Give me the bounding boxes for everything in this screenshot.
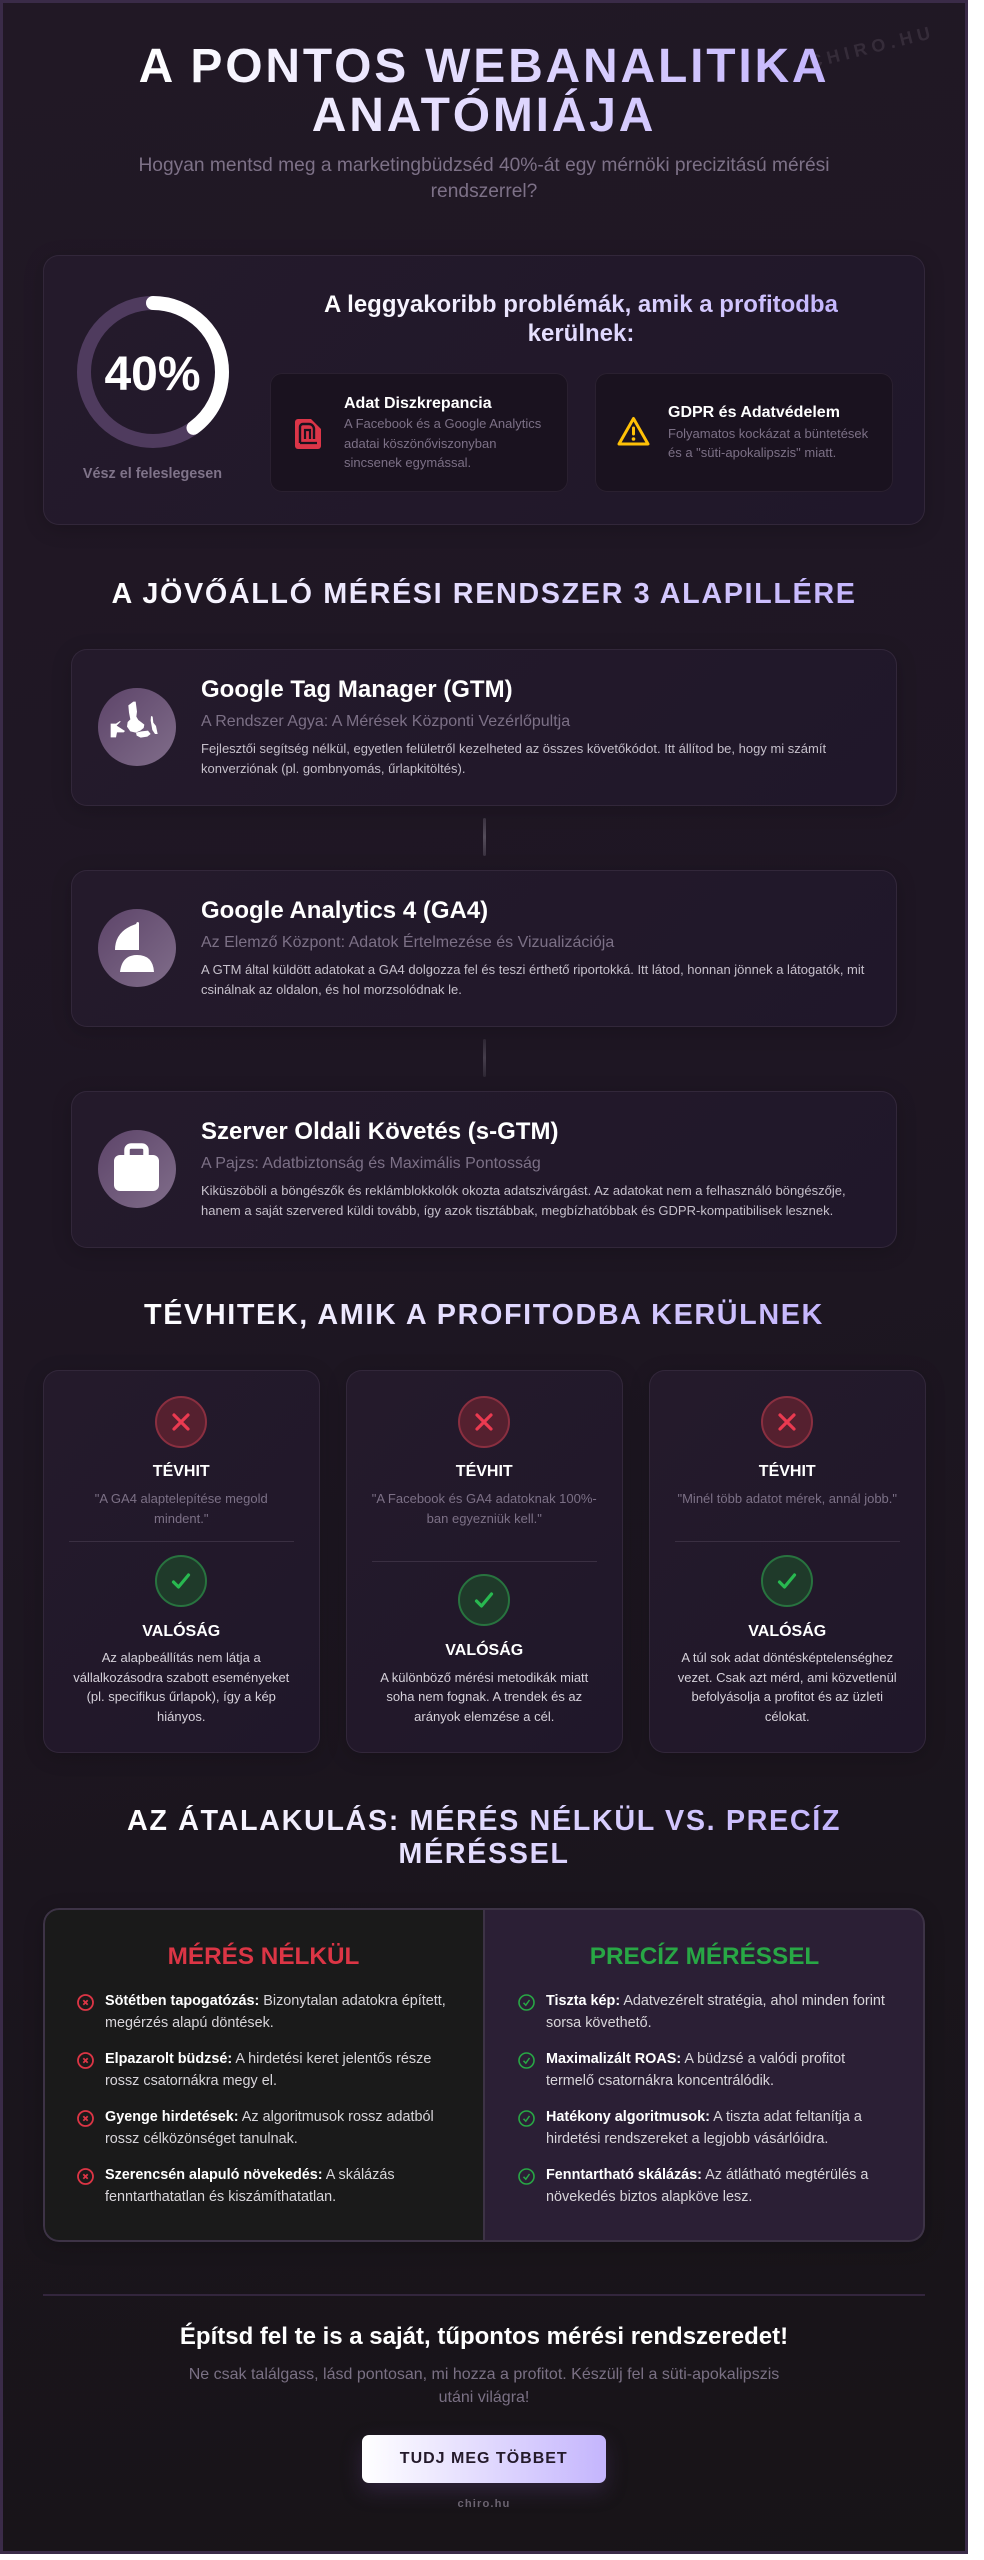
comparison table [43,1908,925,2242]
subtitle [138,154,830,202]
list item: termelő csatornákra koncentrálódik. [546,2073,774,2089]
icon: x circle [77,2052,94,2069]
list item: hirdetési rendszereket a legjobb vásárlóidra. [546,2131,828,2147]
card title: Adat Diszkrepancia [344,394,492,412]
reality label: VALÓSÁG [748,1622,826,1640]
pillar text: Kiküszöböli a böngészők és reklámblokkolók okozta adatszivárgást. Az adatokat nem a felhasználó böngészője, [201,1183,846,1198]
reality text: A különböző mérési metodikák miatt [380,1670,588,1685]
myth quote: "Minél több adatot mérek, annál jobb." [677,1491,897,1506]
icon: check circle [518,2168,535,2185]
myth quote [95,1491,268,1526]
reality text [380,1670,588,1724]
column: without measurement [43,1908,484,2242]
myth label: TÉVHIT [759,1463,816,1480]
panel heading: A leggyakoribb problémák, amik a profitodba [324,291,838,318]
donut chart: 40%: Vész el feleslegesen [83,466,222,482]
connector [482,1039,486,1077]
reality text: Az alapbeállítás nem látja a [102,1650,261,1665]
myth quote: mindent." [154,1511,208,1526]
icon: briefcase [98,1130,176,1208]
panel: myth 2 [346,1370,622,1752]
myth label: TÉVHIT [456,1463,513,1480]
panel: server-side tracking [71,1090,897,1248]
list item [546,2167,868,2205]
subtitle: rendszerrel? [431,180,537,202]
pillar text: Fejlesztői segítség nélkül, egyetlen felületről kezelheted az összes követőkódot. Itt állítod be, hogy mi számít [201,741,826,756]
call to action text: Ne csak találgass, lásd pontosan, mi hozza a profitot. Készülj fel a süti-apokalipszis [189,2366,779,2383]
list item: Tiszta kép: Adatvezérelt stratégia, ahol minden forint [546,1993,885,2009]
list item: Sötétben tapogatózás: Bizonytalan adatokra épített, [105,1993,446,2009]
list item: Maximalizált ROAS: A büdzsé a valódi profitot [546,2051,845,2067]
card text [668,426,868,460]
pillar text: konverziónak (pl. gombnyomás, űrlapkitöltés). [201,761,465,776]
list item: sorsa követhető. [546,2015,652,2031]
connector [482,818,486,856]
list item [546,2109,862,2147]
card text: A Facebook és a Google Analytics [344,416,541,431]
panel: problems [43,255,925,525]
myth quote: ban egyezniük kell." [427,1511,542,1526]
icon: check circle [518,1994,535,2011]
card text [344,416,541,470]
pillar text: csinálnak az oldalon, és hol morzsolódnak le. [201,982,462,997]
icon: data card [295,419,321,449]
reality text [73,1650,290,1724]
list item [546,2051,846,2089]
title [139,40,829,142]
reality text: befolyásolja a profitot és az üzleti [692,1689,883,1704]
card text: adatai köszönőviszonyban [344,436,496,451]
icon: cross [458,1396,510,1448]
list item: rossz célközönséget tanulnak. [105,2131,298,2147]
list item [105,1993,446,2031]
reality text: soha nem fognak. A trendek és az [386,1689,582,1704]
icon: warning triangle [618,416,650,446]
icon: x circle [77,2168,94,2185]
reality text: A túl sok adat döntésképtelenséghez [681,1650,893,1665]
reality label: VALÓSÁG [445,1642,523,1659]
card text: és a "süti-apokalipszis" miatt. [668,445,836,460]
heading: myths: TÉVHITEK, AMIK A PROFITODBA KERÜLNEK [144,1298,824,1330]
reality text: célokat. [765,1709,810,1724]
icon: GTM [98,688,176,766]
pillar title: Google Analytics 4 (GA4) [201,897,488,924]
icon: cross [761,1396,813,1448]
title: ANATÓMIÁJA [312,89,656,142]
myth quote: "A GA4 alaptelepítése megold [95,1491,268,1506]
myth label: TÉVHIT [153,1463,210,1480]
list item: megérzés alapú döntések. [105,2015,274,2031]
pillar subtitle: A Rendszer Agya: A Mérések Központi Vezérlőpultja [201,713,570,730]
pillar title: Google Tag Manager (GTM) [201,676,513,703]
reality label: VALÓSÁG [142,1622,220,1640]
reality text: hiányos. [157,1709,205,1724]
button: TUDJ MEG TÖBBET [400,2450,568,2467]
reality text [678,1650,897,1724]
list item: rossz csatornákra megy el. [105,2073,277,2089]
panel: GA4 [71,870,897,1026]
panel heading: kerülnek: [528,320,634,347]
icon: x circle [77,1994,94,2011]
call to action text [189,2366,779,2406]
myth quote [372,1491,597,1526]
myth quote: "A Facebook és GA4 adatoknak 100%- [372,1491,597,1506]
list item: Elpazarolt büdzsé: A hirdetési keret jelentős része [105,2051,431,2067]
donut chart: 40%: 40% [104,348,201,401]
pillar subtitle: Az Elemző Központ: Adatok Értelmezése és Vizualizációja [201,934,614,951]
icon: check circle [518,2052,535,2069]
list item [105,2109,434,2147]
pillar text: A GTM által küldött adatokat a GA4 dolgozza fel és teszi érthető riportokká. Itt látod, honnan jönnek a látogatók, mit [201,962,864,977]
list item: Hatékony algoritmusok: A tiszta adat feltanítja a [546,2109,862,2125]
pillar text [201,962,864,997]
subtitle: Hogyan mentsd meg a marketingbüdzséd 40%-át egy mérnöki precizitású mérési [138,154,830,176]
watermark: CHIRO.HU [807,22,937,72]
list item [105,2051,431,2089]
icon: cross [155,1396,207,1448]
heading: transformation [127,1805,841,1870]
panel: myth 1 [43,1370,320,1752]
button [362,2435,606,2483]
pillar text [201,741,826,776]
reality text: vállalkozásodra szabott eseményeket [73,1670,289,1685]
card title: GDPR és Adatvédelem [668,404,840,421]
card text: Folyamatos kockázat a büntetések [668,426,868,441]
heading: transformation: AZ ÁTALAKULÁS: MÉRÉS NÉLKÜL VS. PRECÍZ [127,1805,841,1837]
list item [105,2167,395,2205]
footer brand: chiro.hu [458,2498,510,2510]
icon: GA4 [98,909,176,987]
card: data discrepancy [270,372,568,492]
column title: PRECÍZ MÉRÉSSEL [590,1943,819,1970]
column title: MÉRÉS NÉLKÜL [168,1943,359,1970]
panel: GTM [71,648,897,806]
panel heading [324,291,838,347]
reality text: vezet. Csak azt mérd, ami közvetlenül [678,1670,897,1685]
icon: check circle [518,2110,535,2127]
list item: Gyenge hirdetések: Az algoritmusok rossz adatból [105,2109,434,2125]
icon: check [458,1574,510,1626]
reality text: (pl. specifikus űrlapok), így a kép [87,1689,276,1704]
call to action text: utáni világra! [439,2388,529,2406]
title: A PONTOS WEBANALITIKA [139,40,829,93]
card text: sincsenek egymással. [344,455,471,470]
list item [546,1993,885,2031]
heading: pillars: A JÖVŐÁLLÓ MÉRÉSI RENDSZER 3 ALAPILLÉRE [111,578,857,610]
pillar text [201,1183,846,1218]
heading: transformation: MÉRÉSSEL [398,1838,570,1870]
donut chart: 40% [77,296,229,482]
list item: Szerencsén alapuló növekedés: A skálázás [105,2167,395,2183]
icon: check [155,1555,207,1607]
reality text: arányok elemzése a cél. [414,1709,554,1724]
call to action heading: Építsd fel te is a saját, tűpontos mérési rendszeredet! [180,2323,788,2350]
list item: Fenntartható skálázás: Az átlátható megtérülés a [546,2167,868,2183]
panel: myth 3 [649,1370,926,1752]
pillar subtitle: A Pajzs: Adatbiztonság és Maximális Pontosság [201,1155,541,1172]
list item: fenntarthatatlan és kiszámíthatatlan. [105,2189,336,2205]
column: with measurement [484,1908,925,2242]
icon: check [761,1555,813,1607]
card: GDPR [595,372,893,492]
pillar text: hanem a saját szervered küldi tovább, így azok tisztábbak, megbízhatóbbak és GDPR-kompatibilisek lesznek. [201,1203,833,1218]
pillar title: Szerver Oldali Követés (s-GTM) [201,1118,558,1145]
list item: növekedés biztos alapköve lesz. [546,2189,752,2205]
icon: x circle [77,2110,94,2127]
